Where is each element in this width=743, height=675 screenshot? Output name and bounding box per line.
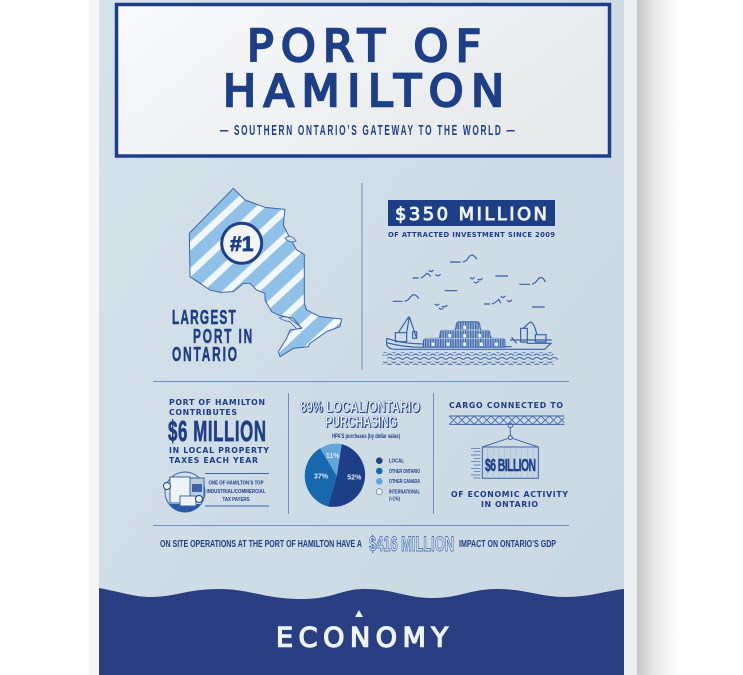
summary line: GDP impact: [160, 533, 556, 556]
caption: chart subtitle: HPA’S purchases (by dollar value): [332, 434, 400, 440]
panel: cargo: [449, 401, 568, 509]
pie chart: [305, 444, 365, 507]
heading: local purchasing: 89% LOCAL/ONTARIO: [300, 399, 420, 416]
heading: economy: ECONOMY: [276, 622, 448, 654]
caption: attracted investment: OF ATTRACTED INVESTMENT SINCE 2009: [388, 231, 555, 239]
panel: largest port in Ontario: [172, 188, 342, 366]
summary line: GDP impact: ON SITE OPERATIONS AT THE PORT OF HAMILTON HAVE A: [160, 538, 362, 550]
icon: number one badge: #1: [230, 233, 254, 256]
chart legend: OTHER ONTARIO: [389, 469, 420, 475]
icon: number one badge: [222, 223, 262, 263]
divider: [433, 393, 434, 514]
text: contributes: CONTRIBUTES: [169, 408, 237, 417]
title panel: [116, 4, 610, 156]
heading: port of: PORT OF: [247, 21, 481, 72]
icon: tax documents: [164, 472, 269, 512]
text: top tax payers: [206, 480, 266, 503]
label: largest port in Ontario: [172, 306, 252, 366]
text: contributes: PORT OF HAMILTON: [169, 398, 265, 407]
heading: local purchasing: PURCHASING: [325, 414, 397, 431]
stat: six million: $6 MILLION: [168, 417, 266, 448]
text: economic activity: OF ECONOMIC ACTIVITY: [451, 490, 568, 499]
text: property taxes: IN LOCAL PROPERTY: [169, 446, 269, 455]
heading: local purchasing: [300, 399, 421, 432]
text: cargo connected to: CARGO CONNECTED TO: [449, 401, 563, 410]
divider: [362, 183, 363, 370]
icon: triangle: [355, 610, 363, 617]
label: largest port in Ontario: LARGEST: [172, 306, 236, 329]
text: top tax payers: INDUSTRIAL/COMMERCIAL: [206, 489, 266, 495]
poster paper: [99, 0, 624, 675]
chart legend: INTERNATIONAL: [389, 490, 421, 496]
icon: crane and container: [449, 416, 564, 478]
badge: 350 million: $350 MILLION: [395, 204, 547, 225]
panel: attracted investment: [383, 200, 558, 365]
footer wave band: [99, 588, 624, 675]
pie chart: 52%: [347, 474, 362, 482]
illustration: ship, birds and clouds: [383, 255, 558, 365]
divider: [153, 381, 569, 382]
pie chart: 37%: [314, 474, 329, 480]
divider: [288, 393, 289, 514]
panel: local purchasing: [300, 399, 421, 507]
panel: property taxes: [164, 398, 269, 512]
text: property taxes: [169, 446, 269, 465]
heading: local purchasing: 89% LOCAL/ONTARIO: [301, 400, 421, 417]
heading: hamilton: HAMILTON: [223, 66, 504, 117]
text: economic activity: IN ONTARIO: [481, 500, 538, 509]
text: top tax payers: TAX PAYERS: [222, 497, 250, 503]
summary line: GDP impact: IMPACT ON ONTARIO’S GDP: [459, 538, 556, 550]
chart legend: [376, 457, 421, 502]
chart legend: LOCAL: [389, 458, 405, 464]
stat: six billion: $6 BILLION: [485, 456, 536, 476]
text: economic activity: [451, 490, 568, 509]
heading: local purchasing: PURCHASING: [326, 415, 398, 432]
summary line: GDP impact: $416 MILLION: [369, 533, 454, 556]
divider: [153, 525, 569, 526]
pie chart: 11%: [326, 453, 340, 460]
text: property taxes: TAXES EACH YEAR: [169, 456, 258, 465]
chart legend: OTHER CANADA: [389, 479, 420, 485]
tagline: — SOUTHERN ONTARIO’S GATEWAY TO THE WORLD —: [220, 121, 515, 139]
icon: Ontario map: [189, 188, 342, 357]
label: largest port in Ontario: ONTARIO: [172, 343, 237, 366]
text: top tax payers: ONE OF HAMILTON’S TOP: [208, 480, 264, 486]
text: contributes: [169, 398, 265, 417]
chart legend: (>1%): [389, 496, 400, 502]
label: largest port in Ontario: PORT IN: [193, 325, 252, 348]
